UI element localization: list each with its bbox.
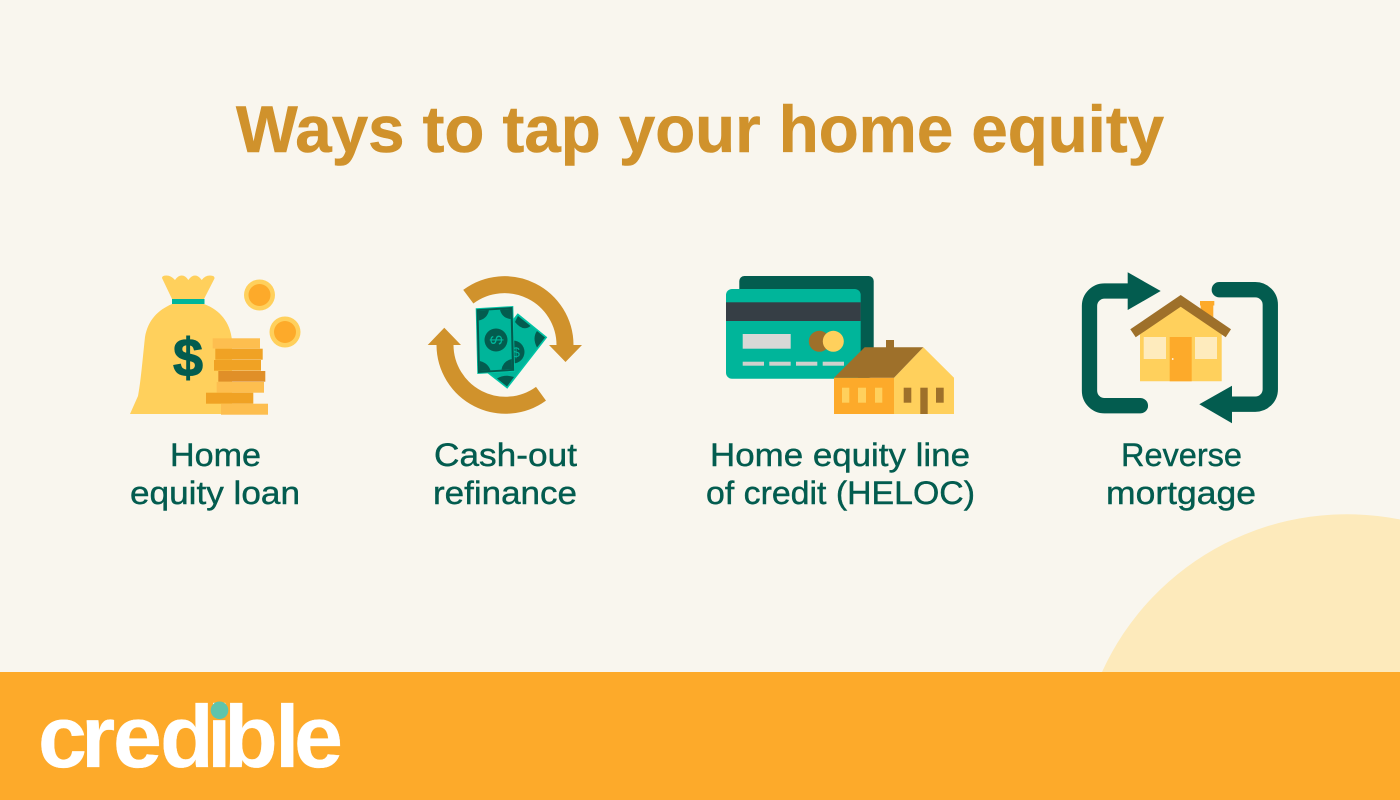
icon: money bag with coins: $ xyxy=(173,328,203,388)
label: cash-out refinance: refinance xyxy=(433,475,577,511)
icon: reverse arrows around house xyxy=(1090,272,1270,423)
icon: money bag with coins xyxy=(130,276,300,415)
label: reverse mortgage: Reverse xyxy=(1121,437,1242,473)
icon: credit cards with house xyxy=(726,276,954,414)
icon: circular arrows with banknotes xyxy=(428,285,582,405)
label: cash-out refinance xyxy=(433,437,577,511)
panel: reverse mortgage xyxy=(1090,272,1270,511)
panel: home equity loan xyxy=(130,276,300,511)
decorative background circle xyxy=(1102,514,1400,672)
label: home equity line of credit: Home equity line xyxy=(710,437,970,473)
credible logo: credible xyxy=(38,687,343,786)
label: home equity line of credit: of credit (HELOC) xyxy=(706,475,975,511)
label: reverse mortgage: mortgage xyxy=(1106,475,1256,511)
title: Ways to tap your home equity xyxy=(236,92,1164,166)
icon: circular arrows with banknotes: $ xyxy=(487,335,506,345)
label: home equity loan: equity loan xyxy=(130,475,300,511)
label: home equity loan xyxy=(130,437,300,511)
icon: circular arrows with banknotes: $ xyxy=(512,344,520,360)
label: reverse mortgage xyxy=(1106,437,1256,511)
footer bar xyxy=(0,672,1400,800)
panel: cash-out refinance xyxy=(428,285,582,511)
label: home equity line of credit xyxy=(706,437,975,511)
label: cash-out refinance: Cash-out xyxy=(434,437,577,473)
panel: home equity line of credit xyxy=(706,276,975,511)
label: home equity loan: Home xyxy=(170,437,261,473)
